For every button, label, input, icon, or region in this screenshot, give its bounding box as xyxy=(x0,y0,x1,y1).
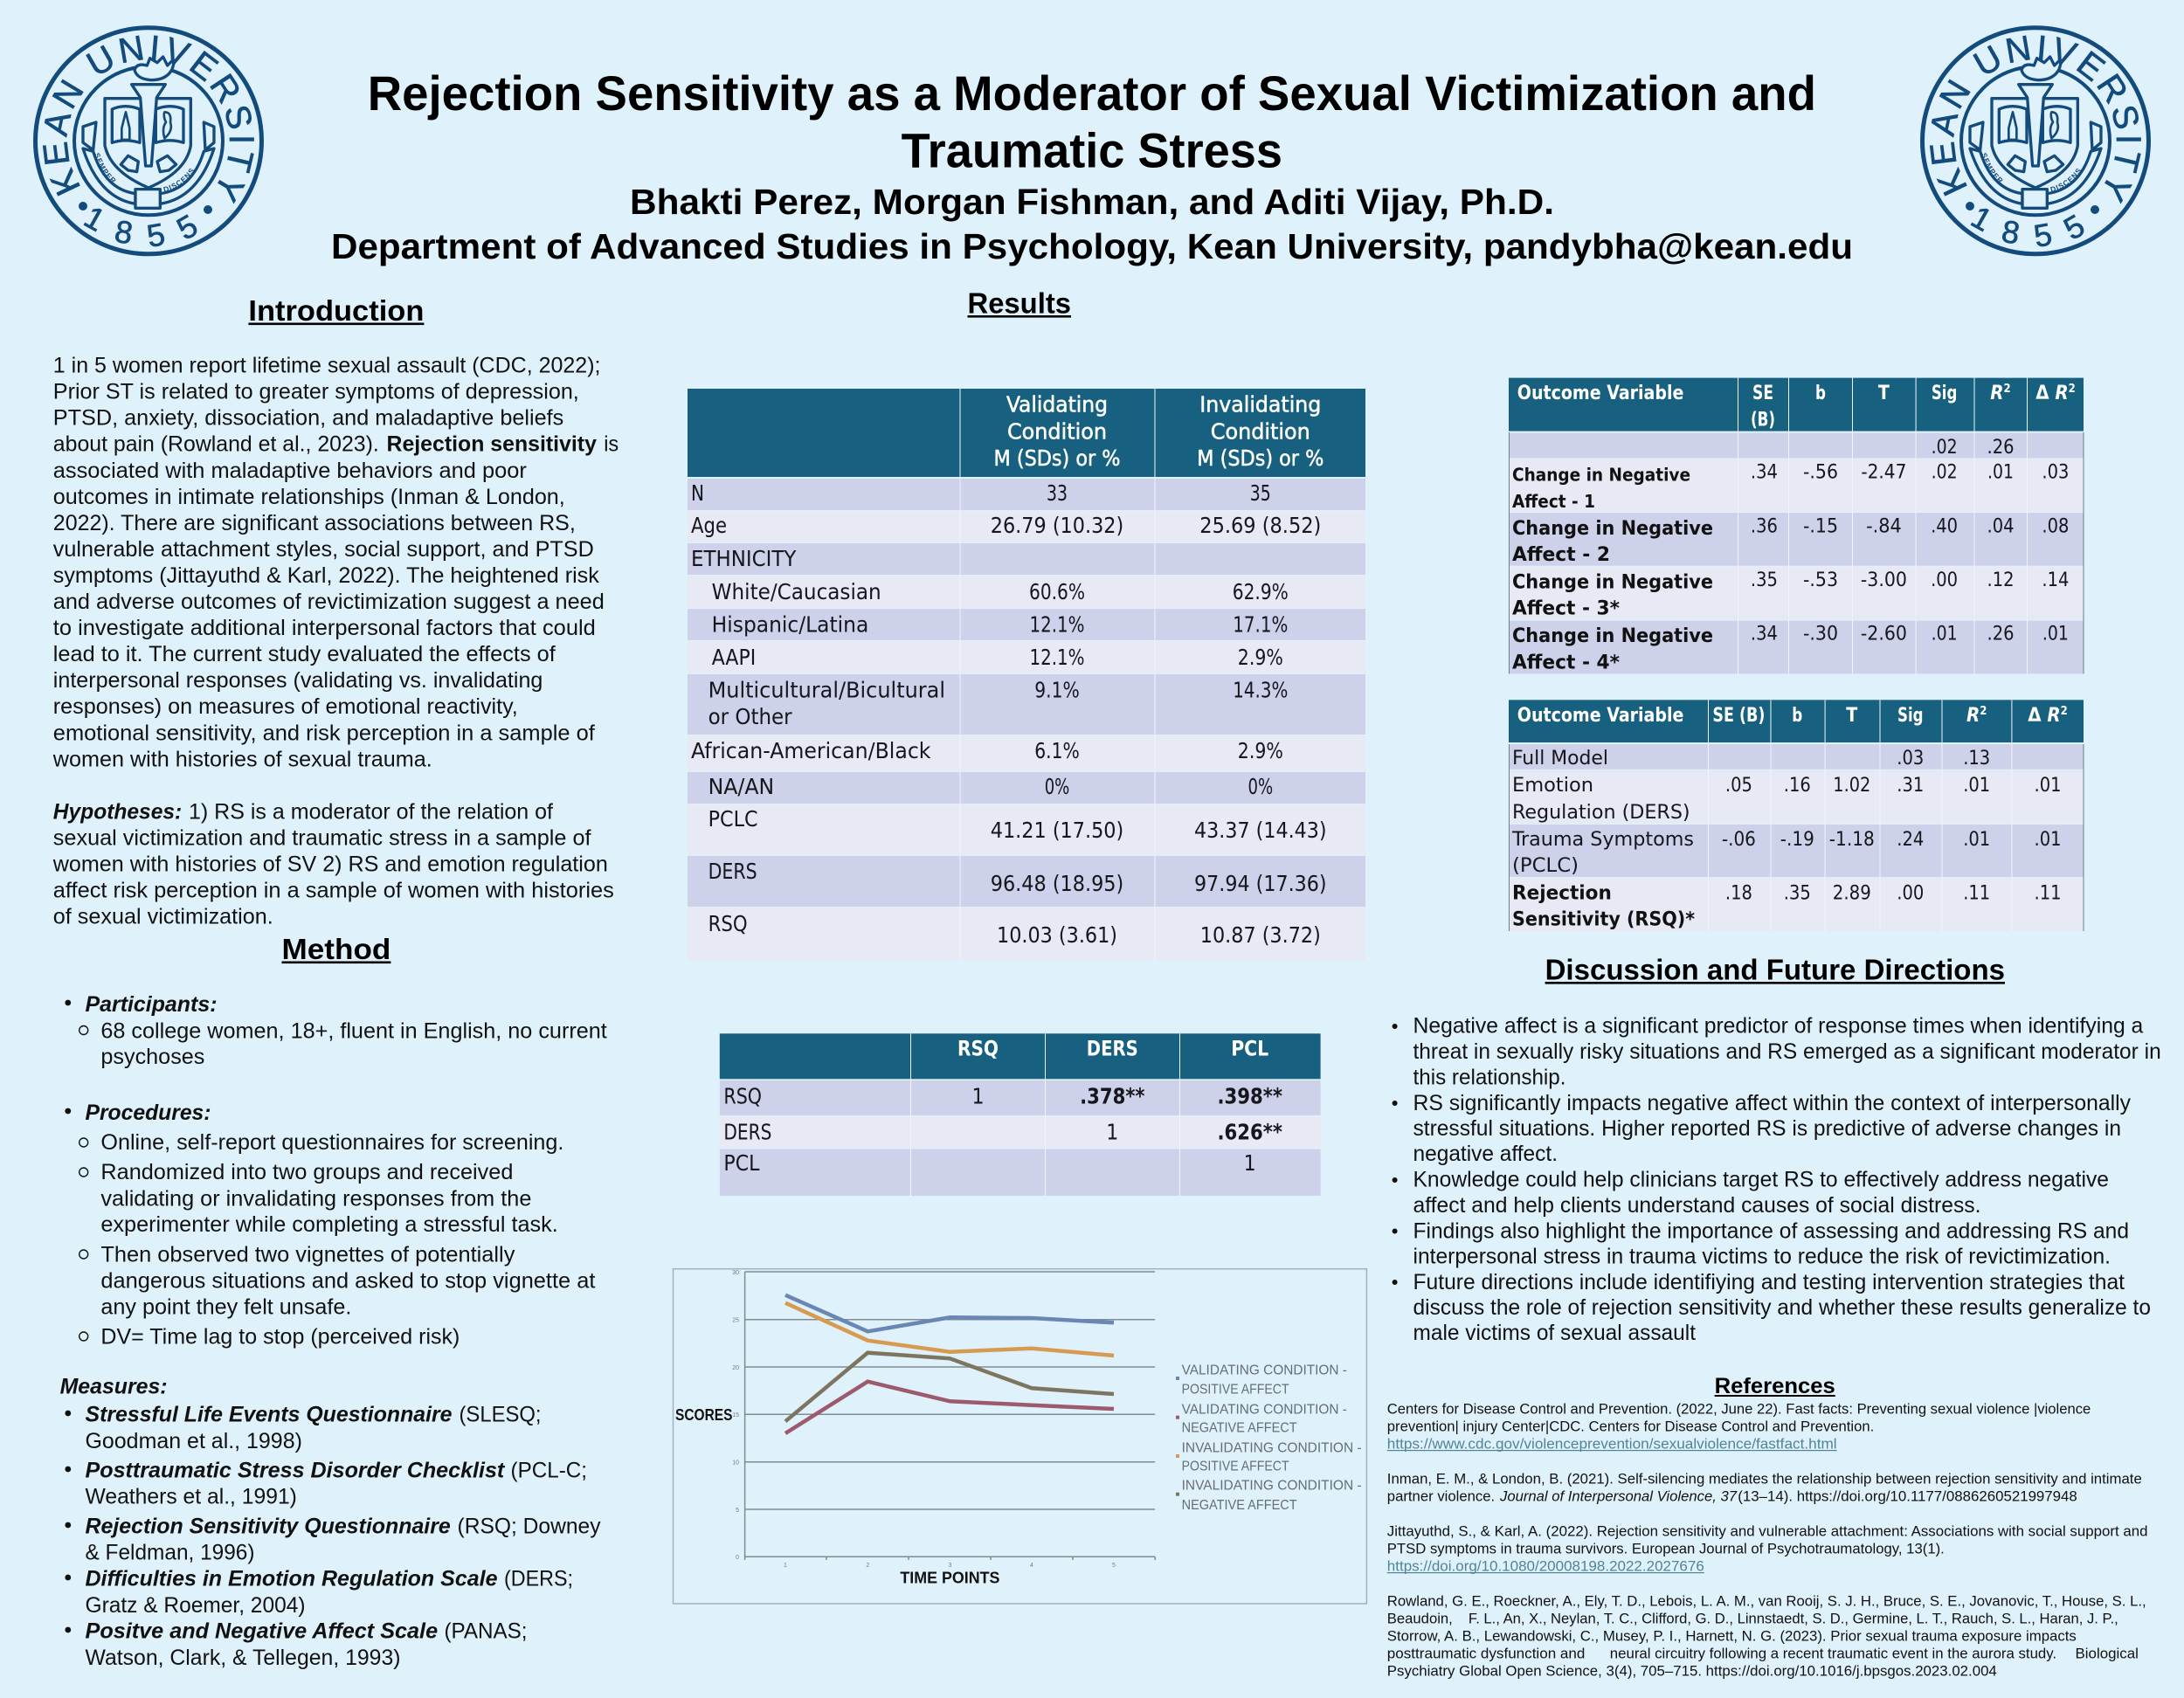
regression table rows: -2.47 xyxy=(1861,461,1906,484)
table: demographics by condition xyxy=(688,389,1365,960)
icon: Kean University seal, right: DISCENS xyxy=(2050,168,2081,191)
text block: measures: Positve and Negative Affect Scale xyxy=(86,1619,438,1644)
text block: introduction paragraph: responses) on measures of emotional reactivity, xyxy=(53,694,518,719)
text block: discussion bullets: threat in sexually risky situations and RS emerged as a significant moderator in xyxy=(1413,1039,2161,1064)
table rows: 2.9% xyxy=(1238,738,1283,763)
table rows: 12.1% xyxy=(1029,645,1085,670)
table rows: 6.1% xyxy=(1034,738,1080,763)
reference: Jittayuthd and Karl: Jittayuthd, S., & Karl, A. (2022). Rejection sensitivity and vulnerable attachment: Associations with social support and xyxy=(1387,1522,2147,1539)
full model table rows: 1.02 xyxy=(1833,774,1870,797)
panel: discussion and future directions xyxy=(1393,954,2161,1345)
reference: Rowland et al. xyxy=(1387,1592,2146,1679)
text block: procedures: any point they felt unsafe. xyxy=(100,1294,351,1319)
text block: participants: 68 college women, 18+, fluent in English, no current xyxy=(100,1018,607,1043)
regression table rows: .26 xyxy=(1987,436,2015,459)
regression table rows: Affect - 4* xyxy=(1512,652,1620,674)
regression table header: 2 xyxy=(2069,383,2076,396)
full model table rows: -.06 xyxy=(1722,828,1756,851)
table rows xyxy=(691,480,1327,948)
axis tick labels: 5 xyxy=(736,1508,739,1514)
regression table rows: Affect - 2 xyxy=(1512,543,1610,566)
full model table rows: .24 xyxy=(1897,828,1924,851)
full model table rows: Rejection xyxy=(1512,881,1612,904)
correlation table rows: DERS xyxy=(723,1119,771,1144)
chart legend: INVALIDATING CONDITION - xyxy=(1182,1440,1362,1455)
text block: introduction paragraph: and adverse outcomes of revictimization suggest a need xyxy=(53,590,605,614)
text block: measures: Goodman et al., 1998) xyxy=(86,1429,302,1453)
chart legend: POSITIVE AFFECT xyxy=(1182,1383,1289,1398)
table rows: 33 xyxy=(1047,480,1068,506)
text block: hypotheses: women with histories of SV 2) RS and emotion regulation xyxy=(52,852,608,877)
full model table rows: .03 xyxy=(1897,747,1924,770)
axis tick labels: 5 xyxy=(1112,1563,1116,1569)
regression table rows: .04 xyxy=(1987,514,2015,537)
regression table rows: -.84 xyxy=(1866,514,1902,537)
reference: Rowland et al.: Storrow, A. B., Lewandowski, C., Musey, P. I., Harnett, N. G. (2023). Prior sexual trauma exposure impacts xyxy=(1387,1627,2077,1644)
reference: Jittayuthd and Karl xyxy=(1387,1522,2147,1574)
correlation table rows: 1 xyxy=(1106,1119,1118,1144)
reference: Inman and London: Inman, E. M., & London, B. (2021). Self-silencing mediates the relationship between rejection sensitivity and intimate xyxy=(1387,1470,2142,1487)
regression table rows: .34 xyxy=(1751,623,1778,645)
text block: measures: Stressful Life Events Questionnaire xyxy=(86,1403,453,1427)
axis tick labels xyxy=(732,1270,1116,1569)
icon: Kean University seal, right: SEMPER xyxy=(1982,153,2002,183)
chart: affect scores over time points xyxy=(673,1269,1366,1604)
regression table header: b xyxy=(1815,383,1826,404)
text block: measures: (SLESQ; xyxy=(460,1403,542,1427)
text block: measures: Weathers et al., 1991) xyxy=(86,1485,297,1509)
axis tick labels: 15 xyxy=(732,1412,739,1418)
regression table rows: Change in Negative xyxy=(1512,570,1713,593)
table rows: or Other xyxy=(708,704,793,729)
axis tick labels: 2 xyxy=(866,1563,869,1569)
table rows: 35 xyxy=(1250,480,1271,506)
full model table rows: .31 xyxy=(1897,774,1924,797)
panel: introduction xyxy=(52,294,619,929)
table rows: 60.6% xyxy=(1029,579,1085,604)
axis tick labels: 4 xyxy=(1030,1563,1033,1569)
table rows: AAPI xyxy=(712,645,756,670)
table rows: 26.79 (10.32) xyxy=(991,513,1123,538)
text block: measures: Difficulties in Emotion Regulation Scale xyxy=(86,1567,498,1591)
text block: introduction paragraph: 2022). There are significant associations between RS, xyxy=(53,511,576,535)
table header: Condition xyxy=(1007,418,1107,444)
title xyxy=(368,66,1816,178)
text block: discussion bullets: Knowledge could help clinicians target RS to effectively address negative xyxy=(1413,1168,2109,1192)
table: regression full model xyxy=(1509,700,2084,931)
panel: method xyxy=(60,933,607,1670)
text block: introduction paragraph: lead to it. The current study evaluated the effects of xyxy=(53,642,556,666)
reference: Rowland et al.: Psychiatry Global Open Science, 3(4), 705–715. https://doi.org/10.1016/j.bpsgos.2023.02.004 xyxy=(1387,1662,1997,1679)
full model table rows: Emotion xyxy=(1512,774,1593,797)
reference: Rowland et al.: posttraumatic dysfunction and xyxy=(1387,1645,1585,1661)
regression table rows: -.56 xyxy=(1803,461,1838,484)
full model table rows: Full Model xyxy=(1512,747,1608,770)
regression table header: T xyxy=(1878,383,1890,404)
table rows: 25.69 (8.52) xyxy=(1199,513,1321,538)
line: invalidating negative affect xyxy=(785,1353,1114,1421)
regression table rows: Affect - 1 xyxy=(1512,491,1595,512)
text block: procedures: Procedures: xyxy=(86,1101,211,1125)
text block: measures: & Feldman, 1996) xyxy=(86,1541,255,1565)
text block: hypotheses: Hypotheses: xyxy=(53,799,182,824)
table header xyxy=(994,392,1324,471)
panel: references xyxy=(1387,1375,2147,1679)
full model table rows: .11 xyxy=(1963,881,1990,904)
regression table rows: .36 xyxy=(1751,514,1778,537)
full model table header: Δ R xyxy=(2028,705,2061,727)
text block: introduction paragraph: is xyxy=(604,432,619,457)
chart legend: NEGATIVE AFFECT xyxy=(1182,1498,1297,1513)
regression table rows: .00 xyxy=(1931,569,1958,591)
full model table rows: .11 xyxy=(2034,881,2062,904)
regression table header: 2 xyxy=(2004,383,2011,396)
line: validating negative affect xyxy=(785,1382,1114,1433)
regression table header: Δ R xyxy=(2035,383,2069,404)
table rows: Age xyxy=(691,513,727,538)
text block: discussion bullets: interpersonal stress in trauma victims to reduce the risk of revictimization. xyxy=(1413,1245,2111,1269)
regression table rows: -.30 xyxy=(1803,623,1838,645)
correlation table header: PCL xyxy=(1231,1036,1268,1060)
correlation table rows: PCL xyxy=(723,1150,760,1176)
regression table rows: .02 xyxy=(1932,436,1958,459)
text block: procedures: DV= Time lag to stop (perceived risk) xyxy=(100,1324,460,1349)
table rows: RSQ xyxy=(708,911,748,936)
table rows: 43.37 (14.43) xyxy=(1194,818,1327,843)
text block: procedures: Then observed two vignettes of potentially xyxy=(100,1242,515,1267)
regression table header: (B) xyxy=(1751,409,1775,431)
reference: Inman and London: (13–14). https://doi.org/10.1177/0886260521997948 xyxy=(1738,1487,2077,1504)
regression table rows: .02 xyxy=(1932,461,1958,484)
full model table header: R xyxy=(1966,705,1980,727)
text block: introduction paragraph: vulnerable attachment styles, social support, and PTSD xyxy=(53,537,594,562)
reference: CDC xyxy=(1387,1400,2091,1452)
text block: introduction paragraph xyxy=(52,354,619,771)
full model table rows: .01 xyxy=(1963,828,1990,851)
text block: procedures: dangerous situations and asked to stop vignette at xyxy=(100,1268,595,1293)
department and contact: Department of Advanced Studies in Psychology, Kean University, pandybha@kean.edu xyxy=(331,226,1853,266)
table rows: N xyxy=(691,480,704,506)
regression table header: Outcome Variable xyxy=(1517,383,1683,404)
text block: hypotheses: of sexual victimization. xyxy=(53,905,273,929)
correlation table rows xyxy=(723,1083,1282,1176)
full model table rows xyxy=(1511,747,2062,931)
text block: introduction paragraph: Prior ST is related to greater symptoms of depression, xyxy=(53,380,579,404)
icon: Kean University seal, left: KEAN UNIVERSITY xyxy=(42,35,254,204)
text block: discussion bullets xyxy=(1393,1014,2161,1345)
correlation table rows: .626** xyxy=(1218,1119,1282,1144)
table rows: Multicultural/Bicultural xyxy=(708,678,945,703)
chart legend: NEGATIVE AFFECT xyxy=(1182,1420,1297,1435)
text block: introduction paragraph: about pain (Rowland et al., 2023). xyxy=(53,432,379,457)
table rows: 2.9% xyxy=(1238,645,1283,670)
regression table rows: .35 xyxy=(1751,569,1778,591)
table: correlations xyxy=(720,1033,1321,1196)
text block: measures: (PANAS; xyxy=(444,1619,528,1644)
text block: measures: Watson, Clark, & Tellegen, 1993) xyxy=(86,1646,400,1670)
text block: hypotheses: affect risk perception in a sample of women with histories xyxy=(53,879,614,903)
regression table rows: -.53 xyxy=(1803,569,1838,591)
full model table header xyxy=(1517,705,2068,727)
text block: introduction paragraph: outcomes in intimate relationships (Inman & London, xyxy=(53,485,565,509)
full model table header: Sig xyxy=(1897,705,1924,727)
text block: introduction paragraph: emotional sensitivity, and risk perception in a sample of xyxy=(53,721,595,745)
correlation table header: DERS xyxy=(1087,1036,1138,1060)
reference: Rowland et al.: F. L., An, X., Neylan, T. C., Clifford, G. D., Linnstaedt, S. D., Germine, L. T., Rauch, S. L., Haran, J. P., xyxy=(1469,1610,2118,1626)
table rows: 9.1% xyxy=(1034,678,1080,703)
regression table header: Sig xyxy=(1932,383,1957,404)
regression table header: SE xyxy=(1752,383,1773,404)
regression table rows: .34 xyxy=(1751,461,1778,484)
correlation table header: RSQ xyxy=(957,1036,999,1060)
text block: hypotheses: sexual victimization and traumatic stress in a sample of xyxy=(53,826,591,851)
text block: participants xyxy=(65,992,607,1069)
correlation table header xyxy=(957,1036,1268,1060)
chart legend xyxy=(1176,1363,1362,1513)
table rows: 0% xyxy=(1045,774,1069,799)
text block: procedures xyxy=(65,1101,595,1349)
text block: participants: psychoses xyxy=(100,1045,204,1069)
reference: Inman and London: partner violence. xyxy=(1387,1487,1495,1504)
full model table rows: -1.18 xyxy=(1829,828,1875,851)
axis tick labels: 10 xyxy=(732,1460,739,1466)
regression table rows: -2.60 xyxy=(1861,623,1907,645)
axis tick labels: 3 xyxy=(948,1563,951,1569)
text block: introduction paragraph: PTSD, anxiety, dissociation, and maladaptive beliefs xyxy=(53,406,563,431)
correlation table rows: RSQ xyxy=(723,1083,762,1108)
text block: introduction paragraph: Rejection sensitivity xyxy=(386,432,597,457)
gridlines and axes xyxy=(745,1272,1155,1560)
text block: hypotheses: 1) RS is a moderator of the relation of xyxy=(189,799,553,824)
full model table header: b xyxy=(1792,705,1802,727)
reference: Jittayuthd and Karl: https://doi.org/10.1080/20008198.2022.2027676 xyxy=(1387,1557,1704,1574)
correlation table rows: .398** xyxy=(1218,1083,1282,1108)
chart legend: POSITIVE AFFECT xyxy=(1182,1459,1289,1474)
full model table header: SE (B) xyxy=(1712,705,1765,727)
regression table rows: .12 xyxy=(1987,569,2015,591)
text block: measures: Rejection Sensitivity Questionnaire xyxy=(86,1514,451,1538)
text block: procedures: Online, self-report questionnaires for screening. xyxy=(100,1130,563,1155)
icon: Kean University seal, left: SEMPER xyxy=(95,153,115,183)
regression table rows: .01 xyxy=(1932,623,1958,645)
authors: Bhakti Perez, Morgan Fishman, and Aditi Vijay, Ph.D. xyxy=(630,182,1554,222)
table rows: 10.03 (3.61) xyxy=(997,922,1117,948)
reference: Rowland et al.: neural circuitry following a recent traumatic event in the aurora study. xyxy=(1610,1645,2056,1661)
table rows: 17.1% xyxy=(1233,612,1288,638)
regression table rows xyxy=(1512,436,2069,674)
regression table rows: .40 xyxy=(1931,514,1958,537)
text block: discussion bullets: stressful situations. Higher reported RS is predictive of adverse changes in xyxy=(1413,1116,2121,1141)
full model table header: 2 xyxy=(2061,705,2068,718)
full model table rows: .16 xyxy=(1784,774,1811,797)
text block: discussion bullets: male victims of sexual assault xyxy=(1413,1321,1696,1345)
text block: discussion bullets: Negative affect is a significant predictor of response times when identifying a xyxy=(1413,1014,2143,1039)
reference: CDC: prevention| injury Center|CDC. Centers for Disease Control and Prevention. xyxy=(1387,1418,1874,1434)
reference: CDC: https://www.cdc.gov/violenceprevention/sexualviolence/fastfact.html xyxy=(1387,1435,1837,1452)
axis tick labels: 1 xyxy=(784,1563,787,1569)
table rows: DERS xyxy=(708,859,757,884)
text block: discussion bullets: Findings also highlight the importance of assessing and addressing RS and xyxy=(1413,1218,2129,1243)
full model table rows: .00 xyxy=(1897,881,1924,904)
regression table rows: .08 xyxy=(2042,514,2069,537)
table header: M (SDs) or % xyxy=(994,445,1120,471)
regression table rows: Change in Negative xyxy=(1512,625,1713,647)
correlation table rows: .378** xyxy=(1080,1083,1145,1108)
reference: Inman and London xyxy=(1387,1470,2142,1504)
text block: introduction paragraph: associated with maladaptive behaviors and poor xyxy=(53,459,527,483)
table rows: Hispanic/Latina xyxy=(712,612,868,638)
icon: Kean University seal, left: DISCENS xyxy=(163,168,194,191)
line: validating positive affect xyxy=(785,1295,1114,1331)
full model table rows: Regulation (DERS) xyxy=(1512,801,1690,824)
regression table rows: .14 xyxy=(2042,569,2069,591)
table rows: 41.21 (17.50) xyxy=(991,818,1123,843)
table rows: 96.48 (18.95) xyxy=(991,871,1123,896)
full model table rows: Sensitivity (RSQ)* xyxy=(1512,908,1695,931)
regression table rows: .01 xyxy=(2042,623,2069,645)
reference: Rowland et al.: Biological xyxy=(2076,1645,2139,1661)
text block: participants: Participants: xyxy=(86,992,217,1017)
text block: discussion bullets: discuss the role of rejection sensitivity and whether these results generalize to xyxy=(1413,1295,2151,1320)
table rows: 97.94 (17.36) xyxy=(1194,871,1327,896)
axis tick labels: 30 xyxy=(732,1270,739,1276)
table rows: 10.87 (3.72) xyxy=(1200,922,1321,948)
full model table rows: .13 xyxy=(1963,747,1990,770)
reference: CDC: Centers for Disease Control and Prevention. (2022, June 22). Fast facts: Preventing sexual violence |violence xyxy=(1387,1400,2091,1417)
full model table rows: .01 xyxy=(1963,774,1990,797)
table rows: 14.3% xyxy=(1233,678,1288,703)
chart legend: VALIDATING CONDITION - xyxy=(1182,1402,1347,1417)
table rows: 12.1% xyxy=(1029,612,1085,638)
heading: results: Results xyxy=(968,286,1071,320)
text block: introduction paragraph: to investigate additional interpersonal factors that could xyxy=(53,616,596,640)
text block: introduction paragraph: symptoms (Jittayuthd & Karl, 2022). The heightened risk xyxy=(53,563,599,588)
table header: Condition xyxy=(1211,418,1310,444)
heading: discussion: Discussion and Future Directions xyxy=(1545,954,2005,986)
regression table header xyxy=(1517,383,2076,431)
table rows: PCLC xyxy=(708,806,758,832)
text block: measures: (PCL-C; xyxy=(510,1458,587,1482)
text block: discussion bullets: RS significantly impacts negative affect within the context of interpersonally xyxy=(1413,1091,2131,1115)
full model table header: 2 xyxy=(1980,705,1987,718)
heading: introduction: Introduction xyxy=(248,294,424,327)
text block: discussion bullets: affect and help clients understand causes of social distress. xyxy=(1413,1193,1981,1218)
text block: introduction paragraph: women with histories of sexual trauma. xyxy=(52,747,432,771)
regression table rows: .01 xyxy=(1987,461,2014,484)
table header: Validating xyxy=(1006,392,1108,418)
regression table rows: -.15 xyxy=(1803,514,1838,537)
axis label: time points: TIME POINTS xyxy=(900,1570,999,1587)
text block: procedures: validating or invalidating responses from the xyxy=(100,1186,531,1211)
chart legend: INVALIDATING CONDITION - xyxy=(1182,1479,1362,1494)
regression table header: R xyxy=(1990,383,2004,404)
reference: Jittayuthd and Karl: PTSD symptoms in trauma survivors. European Journal of Psychotraumatology, 13(1). xyxy=(1387,1540,1945,1556)
table rows: African-American/Black xyxy=(691,738,931,763)
full model table rows: 2.89 xyxy=(1833,881,1871,904)
text block: measures: (DERS; xyxy=(504,1567,573,1591)
full model table rows: .01 xyxy=(2034,828,2062,851)
text block: discussion bullets: Future directions include identifiying and testing intervention strategies that xyxy=(1413,1270,2125,1294)
axis tick labels: 20 xyxy=(732,1365,739,1371)
text block: measures: (RSQ; Downey xyxy=(458,1514,601,1538)
text block: measures: Measures: xyxy=(60,1375,168,1399)
regression table rows: Affect - 3* xyxy=(1512,597,1620,620)
text block: procedures: experimenter while completing a stressful task. xyxy=(100,1212,558,1237)
full model table rows: .35 xyxy=(1784,881,1811,904)
heading: method: Method xyxy=(281,933,390,965)
heading: references: References xyxy=(1715,1375,1835,1398)
text block: discussion bullets: this relationship. xyxy=(1413,1065,1565,1089)
icon: Kean University seal, right: KEAN UNIVERSITY xyxy=(1929,35,2141,204)
full model table rows: .05 xyxy=(1725,774,1752,797)
full model table rows: -.19 xyxy=(1780,828,1814,851)
correlation table rows: 1 xyxy=(1244,1150,1256,1176)
regression table rows: Change in Negative xyxy=(1512,465,1690,486)
reference: Rowland et al.: Rowland, G. E., Roeckner, A., Ely, T. D., Lebois, L. A. M., van Rooij, S. J. H., Bruce, S. E., Jovanovic, T., House, S. L., xyxy=(1387,1592,2146,1609)
regression table rows: -3.00 xyxy=(1861,569,1907,591)
table rows: 62.9% xyxy=(1233,579,1289,604)
full model table header: T xyxy=(1846,705,1858,727)
text block: discussion bullets: negative affect. xyxy=(1413,1142,1558,1166)
title: Traumatic Stress xyxy=(902,123,1282,178)
table header: M (SDs) or % xyxy=(1197,445,1324,471)
full model table rows: .01 xyxy=(2034,774,2062,797)
title: Rejection Sensitivity as a Moderator of Sexual Victimization and xyxy=(368,66,1816,121)
table rows: White/Caucasian xyxy=(712,579,881,604)
icon: Kean University seal, right: 1855 xyxy=(1971,208,2084,246)
full model table rows: .18 xyxy=(1725,881,1752,904)
table header: Invalidating xyxy=(1199,392,1321,418)
text block: introduction paragraph: interpersonal responses (validating vs. invalidating xyxy=(53,668,543,693)
text block: measures: Gratz & Roemer, 2004) xyxy=(86,1593,306,1618)
correlation table rows: 1 xyxy=(971,1083,985,1108)
regression table rows: Change in Negative xyxy=(1512,517,1713,540)
table rows: ETHNICITY xyxy=(691,546,797,571)
chart legend: VALIDATING CONDITION - xyxy=(1182,1363,1347,1377)
text block: procedures: Randomized into two groups and received xyxy=(100,1160,513,1184)
axis tick labels: 0 xyxy=(736,1555,739,1561)
axis label: scores: SCORES xyxy=(675,1406,732,1424)
regression table rows: .26 xyxy=(1987,623,2015,645)
line: invalidating positive affect xyxy=(785,1303,1114,1356)
reference: Inman and London: Journal of Interpersonal Violence, 37 xyxy=(1499,1487,1738,1504)
table: regression on negative affect xyxy=(1509,378,2084,674)
axis tick labels: 25 xyxy=(732,1317,739,1324)
text block: introduction paragraph: 1 in 5 women report lifetime sexual assault (CDC, 2022); xyxy=(53,354,601,378)
text block: measures xyxy=(60,1375,601,1670)
regression table rows: .03 xyxy=(2042,461,2069,484)
table rows: NA/AN xyxy=(708,774,774,799)
text block: hypotheses xyxy=(52,799,614,929)
icon: Kean University seal, left: 1855 xyxy=(84,208,197,246)
full model table rows: (PCLC) xyxy=(1512,854,1579,877)
full model table header: Outcome Variable xyxy=(1517,705,1683,727)
reference: Rowland et al.: Beaudoin, xyxy=(1387,1610,1453,1626)
table rows: 0% xyxy=(1248,774,1273,799)
text block: measures: Posttraumatic Stress Disorder Checklist xyxy=(86,1458,506,1482)
full model table rows: Trauma Symptoms xyxy=(1511,828,1694,851)
